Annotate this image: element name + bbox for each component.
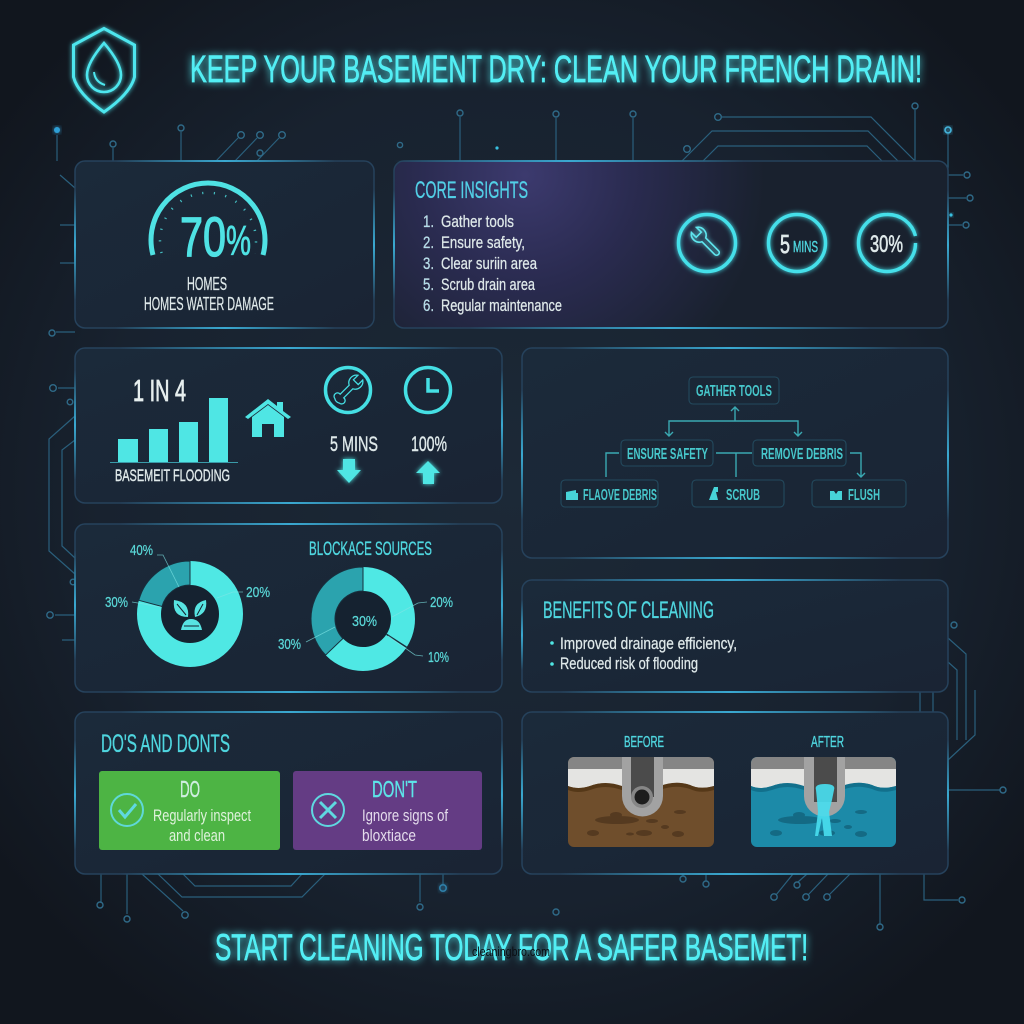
numbered list: 1. <box>423 213 434 231</box>
label water damage: HOMES WATER DAMAGE <box>144 294 274 314</box>
panel: do's and don'ts <box>74 711 503 875</box>
node flush <box>812 480 906 507</box>
stat 5 mins: 5 MINS <box>330 433 378 456</box>
numbered list: Clear suriin area <box>441 255 538 273</box>
heading: CORE INSIGHTS <box>415 177 528 204</box>
benefits list: Improved drainage efficiency, <box>560 634 737 653</box>
panel: blockage sources <box>74 523 503 693</box>
numbered list: 5. <box>423 276 434 294</box>
donut labels: 30% <box>278 636 301 653</box>
ring: 5 mins: 5 <box>780 229 790 259</box>
panel: flooding stats <box>74 347 503 504</box>
numbered list: Ensure safety, <box>441 234 525 252</box>
label before: BEFORE <box>624 734 664 751</box>
panel: core insights <box>393 160 949 329</box>
bar chart <box>110 398 238 463</box>
label homes: HOMES <box>187 274 227 294</box>
node flush: FLUSH <box>848 487 880 504</box>
ring: 30%: 30% <box>870 231 903 258</box>
node remove debris <box>753 440 846 466</box>
percent sign: % <box>226 217 251 264</box>
numbered list <box>423 213 562 315</box>
node flaove debris <box>561 480 658 507</box>
donut labels: 30% <box>105 594 128 611</box>
do card: DO <box>180 776 200 802</box>
benefits list: Reduced risk of flooding <box>560 654 698 673</box>
value 70%: 70 <box>180 205 226 268</box>
stat 1 in 4: 1 IN 4 <box>133 373 186 408</box>
node ensure safety <box>621 440 713 466</box>
donut chart left <box>139 561 231 655</box>
gauge <box>151 183 265 255</box>
numbered list: 2. <box>423 234 434 252</box>
numbered list: Scrub drain area <box>441 276 536 294</box>
node remove debris: REMOVE DEBRIS <box>761 446 843 463</box>
numbered list: 6. <box>423 297 434 315</box>
node gather tools: GATHER TOOLS <box>696 383 772 400</box>
watermark: cleaningbro.com <box>472 944 550 959</box>
don't card: bloxtiace <box>362 826 416 845</box>
do card <box>99 771 280 850</box>
icon: wrench circle <box>326 368 370 412</box>
circuit traces <box>47 103 1006 930</box>
panel: before and after <box>521 711 949 875</box>
label after: AFTER <box>811 734 844 751</box>
node gather tools <box>689 377 779 404</box>
ring: 30% <box>858 214 916 272</box>
heading: BENEFITS OF CLEANING <box>543 597 714 624</box>
icon: leaves and debris <box>174 600 206 630</box>
donut labels: 30% <box>352 613 377 630</box>
panel: flowchart <box>521 347 949 559</box>
node scrub: SCRUB <box>726 487 760 504</box>
donut labels: 20% <box>430 594 453 611</box>
don't card: DON'T <box>372 776 417 802</box>
numbered list: Regular maintenance <box>441 297 562 315</box>
leader lines <box>132 555 427 656</box>
icon: wrench ring <box>678 214 736 272</box>
donut labels <box>105 542 453 666</box>
do card: and clean <box>169 826 225 845</box>
heading: DO'S AND DONTS <box>101 730 230 758</box>
node ensure safety: ENSURE SAFETY <box>627 446 708 463</box>
don't card <box>293 771 482 850</box>
node scrub <box>692 480 784 507</box>
numbered list: 3. <box>423 255 434 273</box>
node flaove debris: FLAOVE DEBRIS <box>583 487 657 504</box>
stat 100%: 100% <box>411 433 447 456</box>
don't card: Ignore signs of <box>362 806 448 825</box>
panel: 70% homes stat <box>74 160 375 329</box>
ring: 5 mins: MINS <box>793 239 818 256</box>
illustration: clogged drain before <box>568 757 714 847</box>
connectors <box>606 407 865 477</box>
benefits list <box>550 634 737 673</box>
icon: clock <box>406 368 450 412</box>
donut labels: 40% <box>130 542 153 559</box>
donut labels: 20% <box>246 584 270 601</box>
ring: 5 mins <box>768 214 826 272</box>
illustration: clear drain after <box>751 757 896 847</box>
donut labels: 10% <box>428 649 449 666</box>
do card: Regularly inspect <box>153 806 251 825</box>
arrow up <box>416 461 440 484</box>
icon: shield with water drop <box>74 28 134 112</box>
numbered list: Gather tools <box>441 213 514 231</box>
heading blockage sources: BLOCKACE SOURCES <box>309 539 432 560</box>
panel: benefits of cleaning <box>521 579 948 693</box>
icon: house <box>245 399 291 437</box>
bar chart label: BASEMEIT FLOODING <box>115 466 230 485</box>
donut chart right <box>311 567 407 659</box>
arrow down <box>337 459 361 483</box>
